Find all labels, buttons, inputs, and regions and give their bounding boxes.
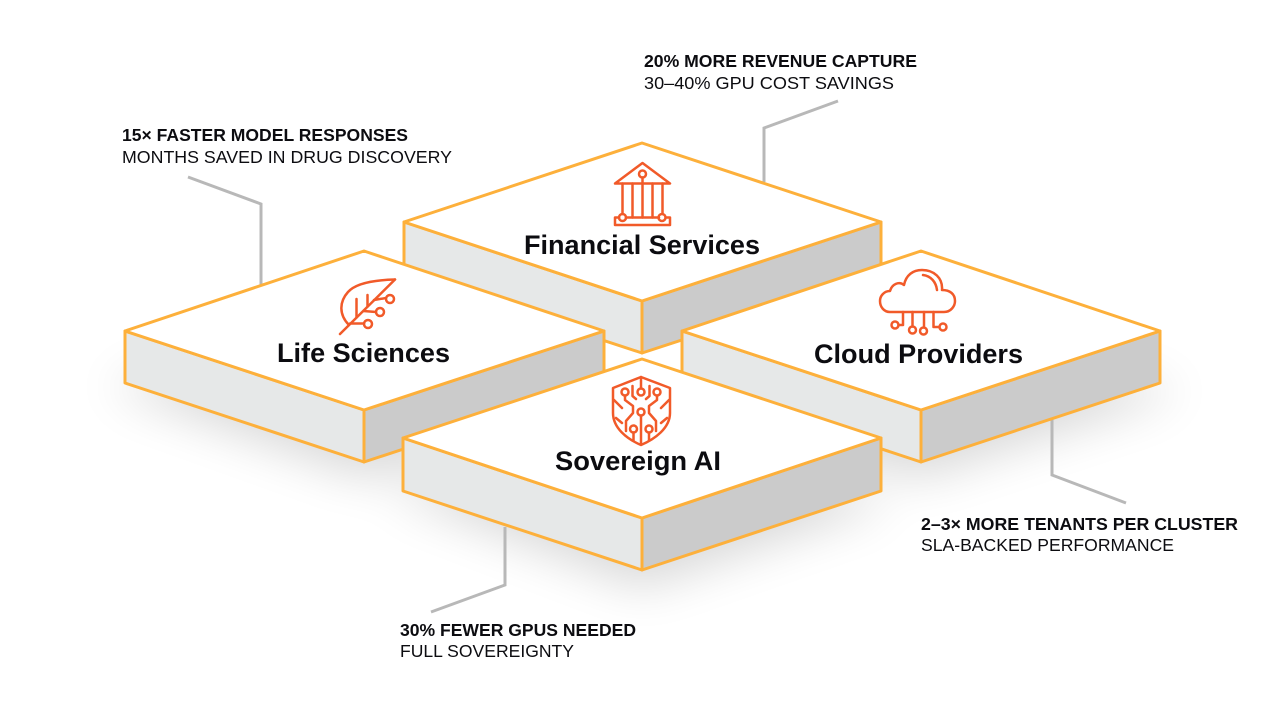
callout: sovereign AI <box>400 620 636 661</box>
callout: cloud providers: SLA-BACKED PERFORMANCE <box>921 535 1174 555</box>
block: cloud providers <box>682 251 1160 462</box>
icon: cloud network <box>880 270 955 334</box>
label: sovereign AI: Sovereign AI <box>555 446 721 476</box>
block: life sciences <box>125 251 604 462</box>
icon: leaf circuit <box>340 280 395 334</box>
leader line: life sciences <box>188 177 261 288</box>
icon: bank building <box>615 163 670 225</box>
icon: shield circuit <box>613 377 670 445</box>
callout: sovereign AI: 30% FEWER GPUS NEEDED <box>400 620 636 640</box>
callout: cloud providers: 2–3× MORE TENANTS PER CLUSTER <box>921 514 1238 534</box>
block: sovereign AI <box>403 359 881 570</box>
label: cloud providers: Cloud Providers <box>814 339 1023 369</box>
label: life sciences: Life Sciences <box>277 338 450 368</box>
callout: financial services <box>644 51 917 93</box>
callout: financial services: 20% MORE REVENUE CAPTURE <box>644 51 917 71</box>
callout: cloud providers <box>921 514 1238 555</box>
callout: life sciences: 15× FASTER MODEL RESPONSES <box>122 125 408 145</box>
leader line: cloud providers <box>1052 417 1126 503</box>
leader line: sovereign AI <box>431 527 505 612</box>
callout: life sciences: MONTHS SAVED IN DRUG DISCOVERY <box>122 147 452 167</box>
callout: life sciences <box>122 125 452 167</box>
callout: financial services: 30–40% GPU COST SAVINGS <box>644 73 894 93</box>
callout: sovereign AI: FULL SOVEREIGNTY <box>400 641 574 661</box>
label: financial services: Financial Services <box>524 230 760 260</box>
leader line: financial services <box>764 101 838 182</box>
drop shadows under blocks <box>105 335 1185 588</box>
block: financial services <box>404 143 881 353</box>
